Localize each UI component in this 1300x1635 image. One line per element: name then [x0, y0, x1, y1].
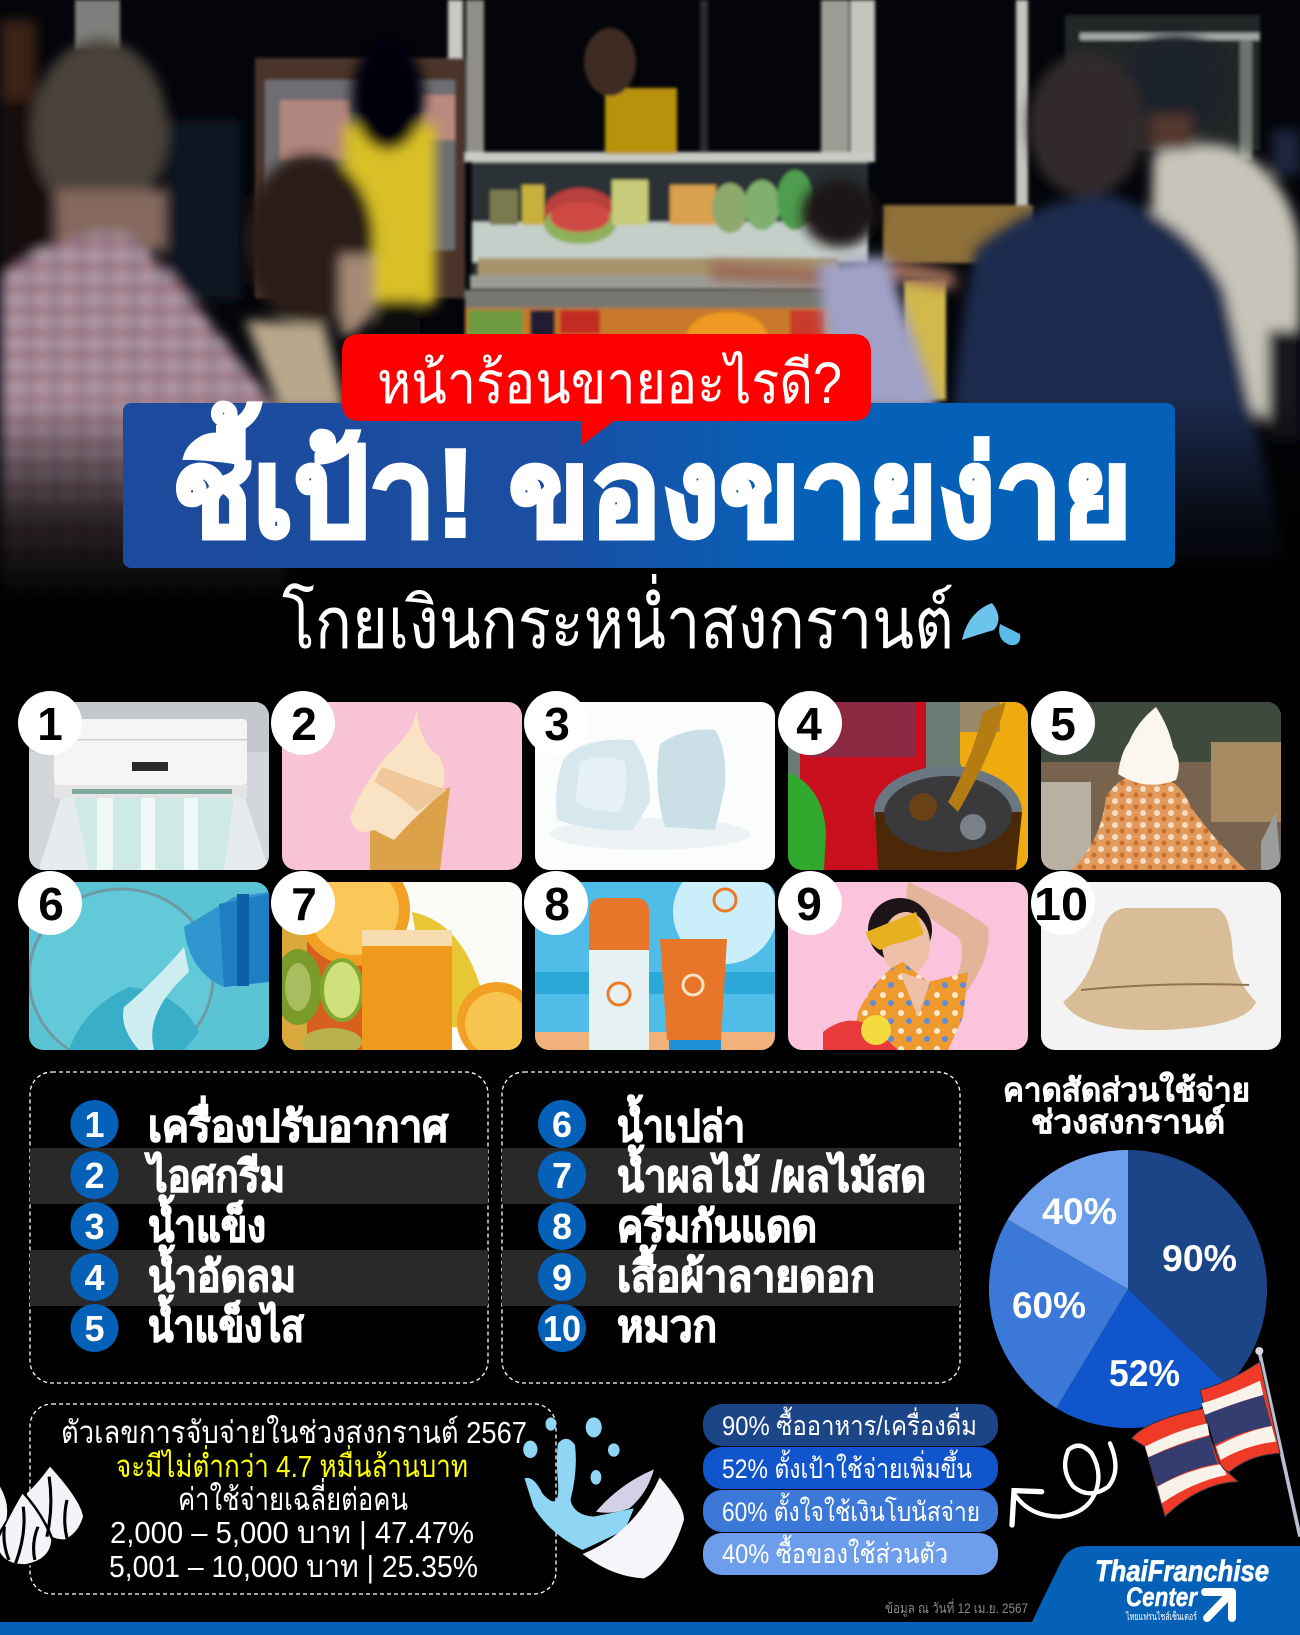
panel: list items 6 to 10 [502, 1072, 960, 1383]
pie chart heading: ช่วงสงกรานต์ [1031, 1104, 1225, 1140]
panel: list items 1 to 5: เครื่องปรับอากาศ [148, 1096, 449, 1151]
panel: list items 1 to 5: น้ำแข็ง [148, 1194, 266, 1251]
icon: water drops [962, 603, 1020, 645]
red speech bubble: หน้าร้อนขายอะไรดี? [377, 350, 842, 416]
panel: spending figures: ตัวเลขการจับจ่ายในช่วงสงกรานต์ 2567 [61, 1415, 527, 1450]
tile number badges: 1 [37, 698, 63, 750]
logo: ThaiFranchise Center: ไทยแฟรนไชส์เซ็นเตอร์ [1125, 1609, 1197, 1623]
title banner: ชี้เป้า! ของขายง่าย [172, 402, 1132, 563]
legend pills [703, 1404, 998, 1575]
legend pills: 52% ตั้งเป้าใช้จ่ายเพิ่มขึ้น [722, 1449, 972, 1484]
panel: list items 6 to 10: หมวก [617, 1303, 717, 1351]
tile 2: ice cream cone [282, 702, 522, 870]
subtitle: โกยเงินกระหน่ำสงกรานต์ [282, 574, 954, 664]
icon: water bowl splash [523, 1417, 684, 1578]
panel: list items 1 to 5: 5 [84, 1308, 105, 1349]
panel: list items 1 to 5: 4 [84, 1257, 105, 1298]
bottom bar [0, 1622, 1300, 1635]
icon: curly arrow [1012, 1443, 1115, 1525]
panel: list items 1 to 5: น้ำอัดลม [148, 1244, 296, 1301]
tile number badges: 6 [38, 878, 64, 930]
panel: list items 6 to 10: น้ำผลไม้ /ผลไม้สด [617, 1144, 926, 1201]
panel: spending figures: 5,001 – 10,000 บาท | 25.35% [109, 1549, 478, 1584]
pie chart [989, 1150, 1267, 1428]
icon: thai flag [1132, 1347, 1300, 1537]
panel: list items 6 to 10: น้ำเปล่า [617, 1094, 745, 1151]
red speech bubble [342, 334, 871, 445]
tile number badges: 2 [291, 698, 317, 750]
source note: ข้อมูล ณ วันที่ 12 เม.ย. 2567 [885, 1599, 1028, 1617]
tile number badges: 4 [796, 698, 822, 750]
panel: list items 6 to 10: 6 [552, 1104, 572, 1145]
logo: ThaiFranchise Center: ThaiFranchise [1095, 1555, 1269, 1588]
tile 7: fruit and juice [282, 882, 522, 1050]
tile number badges: 5 [1050, 698, 1076, 750]
panel: spending figures [30, 1404, 556, 1594]
panel: list items 6 to 10: เสื้อผ้าลายดอก [617, 1244, 875, 1301]
logo: ThaiFranchise Center [1032, 1546, 1300, 1623]
pie chart: 60% [1012, 1285, 1086, 1326]
panel: list items 1 to 5: น้ำแข็งไส [148, 1294, 305, 1351]
panel: list items 6 to 10: ครีมกันแดด [617, 1203, 817, 1251]
tile number badges: 7 [291, 878, 317, 930]
panel: list items 6 to 10: 10 [543, 1308, 581, 1349]
tile 5: shaved ice dessert [1041, 702, 1281, 870]
panel: spending figures: ค่าใช้จ่ายเฉลี่ยต่อคน [178, 1478, 408, 1517]
tile 3: ice cubes [535, 702, 775, 870]
tile number badges: 10 [1034, 878, 1088, 930]
tile number badges [18, 691, 1095, 935]
panel: list items 6 to 10: 9 [552, 1257, 572, 1298]
panel: list items 1 to 5: 1 [84, 1104, 105, 1145]
panel: spending figures: 2,000 – 5,000 บาท | 47.47% [110, 1515, 474, 1550]
panel: spending figures: จะมีไม่ต่ำกว่า 4.7 หมื่นล้านบาท [116, 1445, 468, 1484]
panel: list items 1 to 5: ไอศกรีม [144, 1151, 285, 1201]
panel: list items 1 to 5: 2 [84, 1155, 105, 1196]
logo: ThaiFranchise Center: Center [1126, 1582, 1198, 1612]
panel: list items 1 to 5: 3 [84, 1206, 105, 1247]
pie chart heading: คาดสัดส่วนใช้จ่าย [1003, 1071, 1250, 1108]
panel: list items 6 to 10: 8 [552, 1206, 572, 1247]
legend pills: 60% ตั้งใจใช้เงินโบนัสจ่าย [722, 1492, 980, 1527]
tile 4: soft drinks [788, 702, 1028, 870]
pie chart: 40% [1042, 1191, 1117, 1232]
tile 1: air conditioner [29, 702, 269, 870]
pie chart heading [1003, 1071, 1250, 1140]
legend pills: 90% ซื้ออาหาร/เครื่องดื่ม [722, 1406, 977, 1441]
pie chart: 90% [1162, 1238, 1237, 1279]
tile 10: bucket hat [1041, 882, 1281, 1050]
tile number badges: 8 [544, 878, 570, 930]
tile 9: woman in floral shirt [788, 882, 1028, 1050]
panel: list items 1 to 5 [30, 1072, 488, 1383]
legend pills: 40% ซื้อของใช้ส่วนตัว [722, 1534, 948, 1569]
tile 6: water pouring [29, 882, 269, 1065]
icon: whipped cream [0, 1467, 83, 1565]
pie chart: 52% [1109, 1353, 1180, 1394]
tile number badges: 9 [796, 878, 822, 930]
hero photo: blurred street stall crowd [0, 0, 1300, 640]
panel: list items 6 to 10: 7 [552, 1155, 572, 1196]
tile number badges: 3 [544, 698, 570, 750]
tile 8: sunscreen [535, 882, 775, 1050]
